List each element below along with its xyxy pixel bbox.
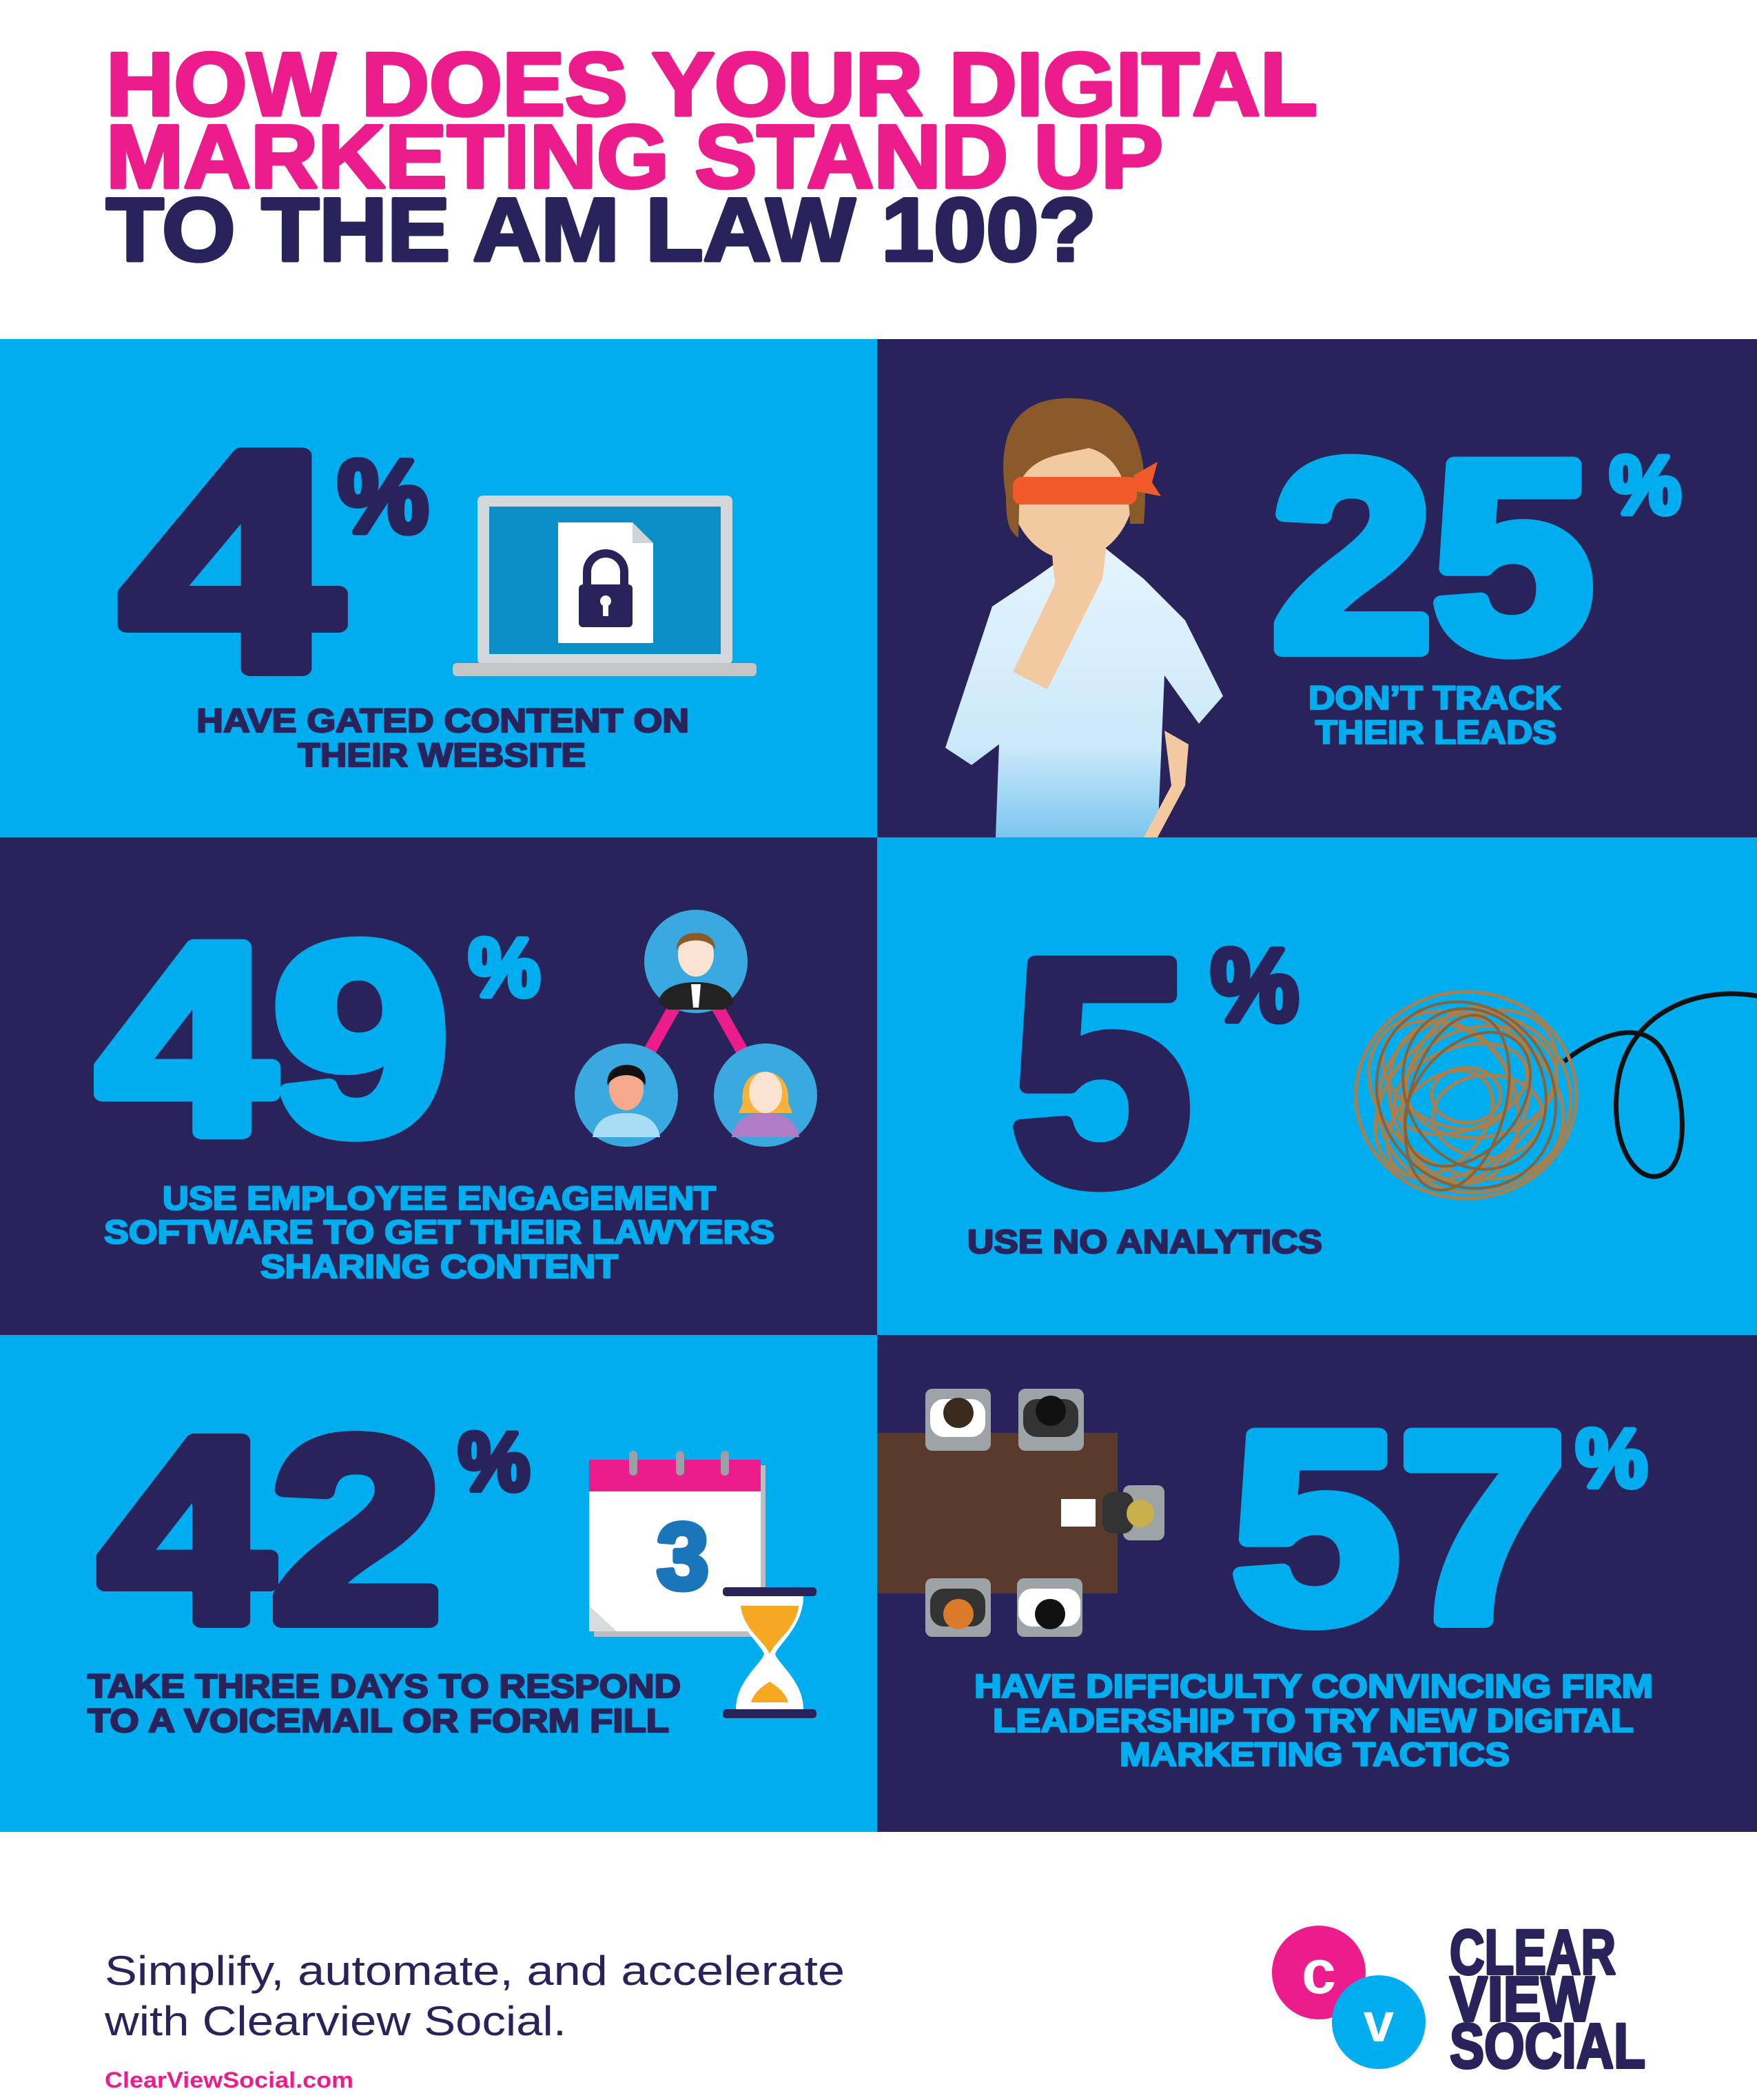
icon: calendar: 3 [657, 1504, 709, 1609]
logo: c [1302, 1938, 1336, 2007]
stat: 49%: % [469, 921, 540, 1014]
panel: employee engagement [0, 837, 877, 1335]
stat: 49% [98, 888, 540, 1189]
text: engagement caption: SOFTWARE TO GET THEIR LAWYERS [104, 1214, 774, 1251]
icon: hourglass [723, 1587, 816, 1718]
stat: 25%: % [1610, 439, 1681, 531]
title [106, 34, 1317, 280]
footer link: ClearViewSocial.com [105, 2068, 353, 2092]
panel: response time [0, 1335, 877, 1832]
icon: people network [575, 910, 817, 1147]
icon: laptop with locked document [453, 496, 757, 676]
stat: 5% [1011, 895, 1299, 1249]
text: lead tracking caption: THEIR LEADS [1315, 715, 1556, 751]
stat: 57%: % [1576, 1412, 1647, 1505]
text: lead tracking caption [1308, 680, 1561, 751]
logo: SOCIAL [1450, 2011, 1645, 2081]
stat: 57%: 57 [1232, 1377, 1566, 1678]
text: response caption: TO A VOICEMAIL OR FORM FILL [88, 1703, 669, 1740]
title: HOW DOES YOUR DIGITAL [106, 34, 1317, 134]
stat: 4%: % [338, 438, 429, 554]
icon: calendar [589, 1451, 766, 1637]
text: response caption: TAKE THREE DAYS TO RESPOND [88, 1669, 681, 1705]
panel: leadership [877, 1335, 1757, 1832]
illustration: blindfolded woman [945, 398, 1223, 837]
stat: 42% [101, 1385, 530, 1676]
footer tagline: with Clearview Social. [104, 1998, 566, 2044]
text: leadership caption: HAVE DIFFICULTY CONVINCING FIRM [974, 1669, 1653, 1705]
panel: lead tracking [877, 339, 1757, 837]
stat: 4%: 4 [121, 389, 343, 735]
stat: 49%: 49 [98, 888, 449, 1189]
footer tagline: Simplify, automate, and accelerate [105, 1948, 845, 1994]
stat: 42%: 42 [101, 1385, 442, 1676]
logo: CLEAR [1450, 1917, 1616, 1988]
stat: 42%: % [458, 1416, 530, 1508]
text: engagement caption: USE EMPLOYEE ENGAGEMENT [163, 1181, 716, 1217]
text: engagement caption [104, 1181, 774, 1285]
title: MARKETING STAND UP [106, 106, 1163, 207]
logo: v [1364, 1992, 1395, 2053]
logo [1272, 1917, 1645, 2081]
stat: 4% [121, 389, 429, 735]
logo: VIEW [1450, 1964, 1594, 2035]
text: gated content caption: THEIR WEBSITE [298, 737, 586, 774]
text: leadership caption [974, 1669, 1653, 1773]
footer tagline [104, 1948, 845, 2044]
text: analytics caption: USE NO ANALYTICS [967, 1224, 1322, 1261]
stat: 5%: 5 [1011, 895, 1191, 1249]
panel: gated content [0, 339, 877, 837]
stat: 25%: 25 [1272, 406, 1593, 706]
panel: analytics [877, 837, 1757, 1335]
text: engagement caption: SHARING CONTENT [260, 1249, 618, 1285]
title: TO THE AM LAW 100? [106, 179, 1096, 280]
text: leadership caption: LEADERSHIP TO TRY NEW DIGITAL [993, 1703, 1634, 1740]
text: leadership caption: MARKETING TACTICS [1120, 1737, 1510, 1773]
stat: 5%: % [1211, 927, 1299, 1043]
text: gated content caption [196, 703, 689, 774]
text: gated content caption: HAVE GATED CONTENT ON [196, 703, 689, 740]
illustration: boardroom table [877, 1389, 1164, 1637]
icon: tangled yarn ball [1339, 967, 1757, 1223]
text: lead tracking caption: DON’T TRACK [1308, 680, 1561, 717]
text: response caption [88, 1669, 681, 1740]
